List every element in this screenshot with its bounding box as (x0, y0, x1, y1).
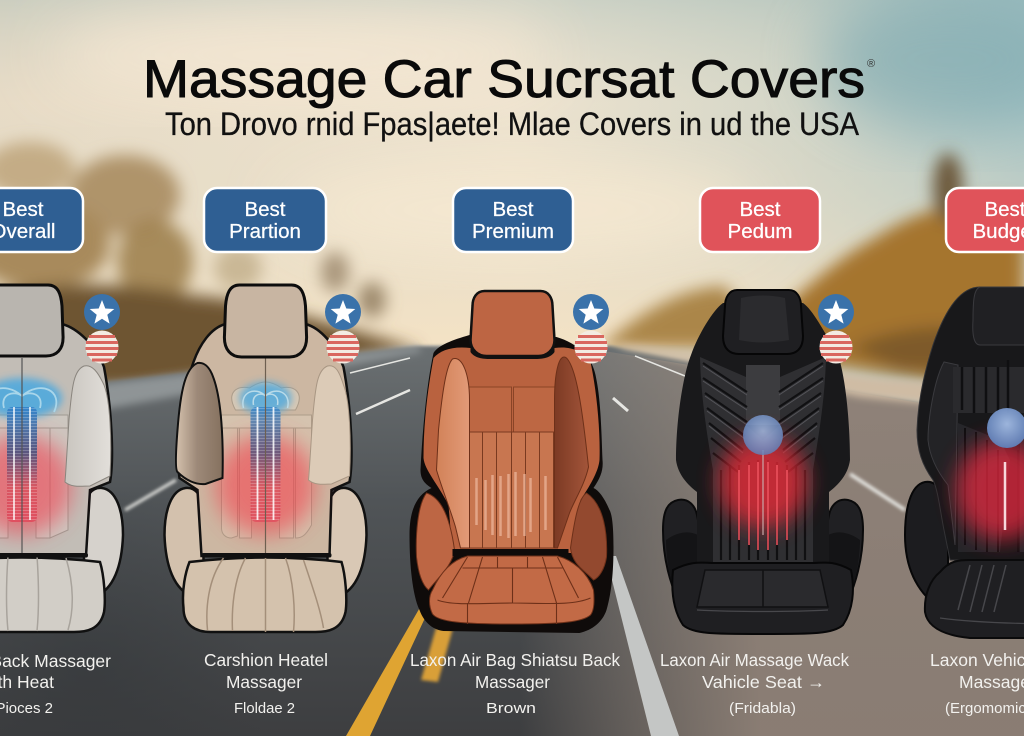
badge: Best Premium (453, 188, 573, 252)
icon: star and flag 2 (325, 294, 361, 364)
badge: Best Pedum (700, 188, 820, 252)
badge: Best Premium: Premium (472, 220, 554, 243)
caption seat 2: Floldae 2 (234, 700, 295, 717)
seat 3: brown leather (410, 291, 614, 633)
caption seat 3: Laxon Air Bag Shiatsu Back (410, 650, 620, 670)
title: Massage Car Sucrsat Covers (143, 50, 865, 109)
badge: Best Overall (0, 188, 83, 252)
seat 5: black ergonomic, cropped at right edge (905, 287, 1024, 638)
caption seat 4: Laxon Air Massage Wack (660, 650, 849, 670)
badge: Best Premium: Best (492, 198, 534, 221)
caption seat 1 (0, 651, 111, 717)
badge: Best Overall: Best (2, 198, 44, 221)
caption seat 4: Vahicle Seat → (702, 672, 825, 692)
badge: Best Prartion (204, 188, 326, 252)
icon: star and flag 3 (573, 294, 609, 364)
badge: Best Prartion: Best (244, 198, 286, 221)
caption seat 2: Massager (226, 672, 302, 692)
icon: star and flag 1 (84, 294, 120, 364)
caption seat 3 (410, 650, 620, 717)
badge: Best Prartion: Prartion (229, 220, 301, 243)
caption seat 4: (Fridabla) (729, 700, 796, 717)
road with lane markings (0, 343, 1024, 736)
caption seat 4 (660, 650, 849, 717)
caption seat 2: Carshion Heatel (204, 650, 328, 670)
badge: Best Pedum: Best (739, 198, 781, 221)
badge: Best Budget (946, 188, 1024, 252)
seat 4: black leather with red massage glow (663, 290, 863, 634)
subtitle: Ton Drovo rnid Fpas|aete! Mlae Covers in ud the USA (165, 106, 860, 142)
caption seat 5 (930, 650, 1024, 717)
icon: star and flag 4 (818, 294, 854, 364)
caption seat 3: Massager (475, 672, 550, 692)
seat 2: beige massage cover (164, 285, 366, 632)
badge: Best Pedum: Pedum (728, 220, 792, 243)
caption seat 2 (204, 650, 328, 717)
seat 1: grey massage cover (0, 285, 123, 632)
title: ® (867, 58, 875, 70)
caption seat 3: Brown (486, 700, 536, 717)
